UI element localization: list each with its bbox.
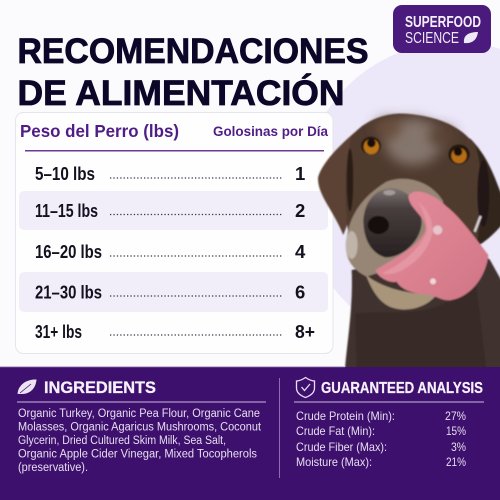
analysis rows [296,409,466,469]
ingredients list: Organic Apple Cider Vinegar, Mixed Tocopherols [18,448,257,460]
analysis rows: Crude Fiber (Max): [296,440,387,454]
dog photo illustration [318,113,500,372]
column heading: treats: Golosinas por Día [213,124,328,139]
panel: guaranteed analysis [294,378,484,469]
title [18,31,368,113]
row: 31+ lbs: 8+ [295,321,315,342]
row: 11-15 lbs: 2 [295,200,305,221]
row: 11-15 lbs [35,200,305,221]
row: 21-30 lbs [35,282,305,302]
ingredients list: Glycerin, Dried Cultured Skim Milk, Sea Salt, [18,435,226,447]
row: 31+ lbs: 31+ lbs [35,321,82,342]
row: 5-10 lbs: 1 [295,163,305,184]
analysis rows: Crude Protein (Min): [296,409,395,423]
ingredients list: (preservative). [18,462,88,474]
row: 5-10 lbs [35,163,305,184]
title: RECOMENDACIONES [18,31,368,71]
row: 16-20 lbs: 4 [295,241,306,262]
icon: badge leaf [464,32,478,43]
column heading: weight: Peso del Perro (lbs) [20,121,179,141]
row: 21-30 lbs: 21–30 lbs [35,282,102,302]
analysis rows: Crude Fat (Min): [296,424,375,438]
ingredients list: Molasses, Organic Agaricus Mushrooms, Coconut [18,422,262,434]
row: 31+ lbs [35,321,315,342]
icon: shield [296,378,314,398]
row: 16-20 lbs [35,241,306,262]
panel: feeding table [16,112,333,354]
ingredients list: Organic Turkey, Organic Pea Flour, Organic Cane [18,408,260,420]
row: 21-30 lbs: 6 [295,282,305,302]
row: 5-10 lbs: 5–10 lbs [35,163,95,184]
footer band [0,366,500,500]
analysis rows: 21% [446,455,466,469]
ingredients list [18,408,262,474]
analysis rows: 27% [445,409,466,423]
ingredients heading: INGREDIENTS [44,378,156,397]
icon: leaf [17,379,37,394]
analysis rows: 3% [451,440,466,454]
row: 11-15 lbs: 11–15 lbs [35,200,98,221]
panel: ingredients [17,378,266,474]
analysis rows: Moisture (Max): [296,455,372,469]
row: 16-20 lbs: 16–20 lbs [35,241,102,262]
brand badge: SCIENCE [405,30,459,47]
brand badge [393,5,491,53]
title: DE ALIMENTACIÓN [18,73,344,113]
analysis rows: 15% [446,424,466,438]
